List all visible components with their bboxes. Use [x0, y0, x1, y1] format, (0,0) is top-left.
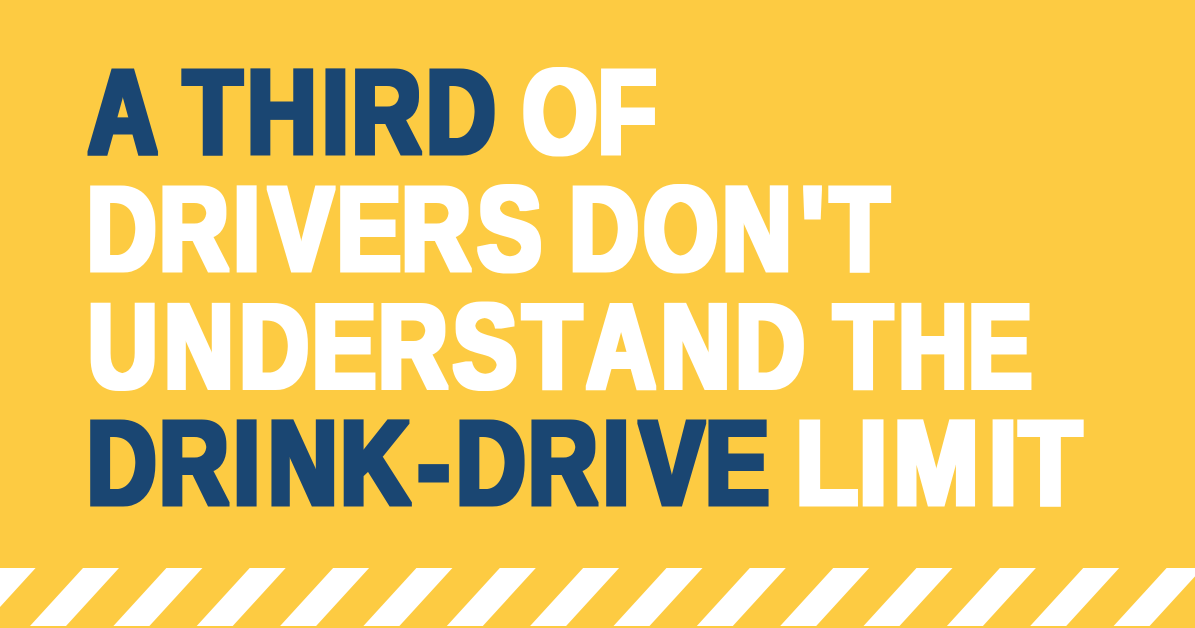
title line 1: OF	[522, 45, 657, 180]
diagonal hazard stripe band	[0, 568, 1195, 626]
title	[87, 45, 1082, 531]
title line 1: A THIRD	[88, 45, 496, 180]
title line 4: LIMIT	[796, 396, 1082, 531]
title line 2: DRIVERS DON'T	[87, 162, 889, 297]
title line 4: DRINK-DRIVE	[87, 396, 769, 531]
title line 4	[87, 396, 1082, 531]
title line 3: UNDERSTAND THE	[88, 280, 1032, 415]
